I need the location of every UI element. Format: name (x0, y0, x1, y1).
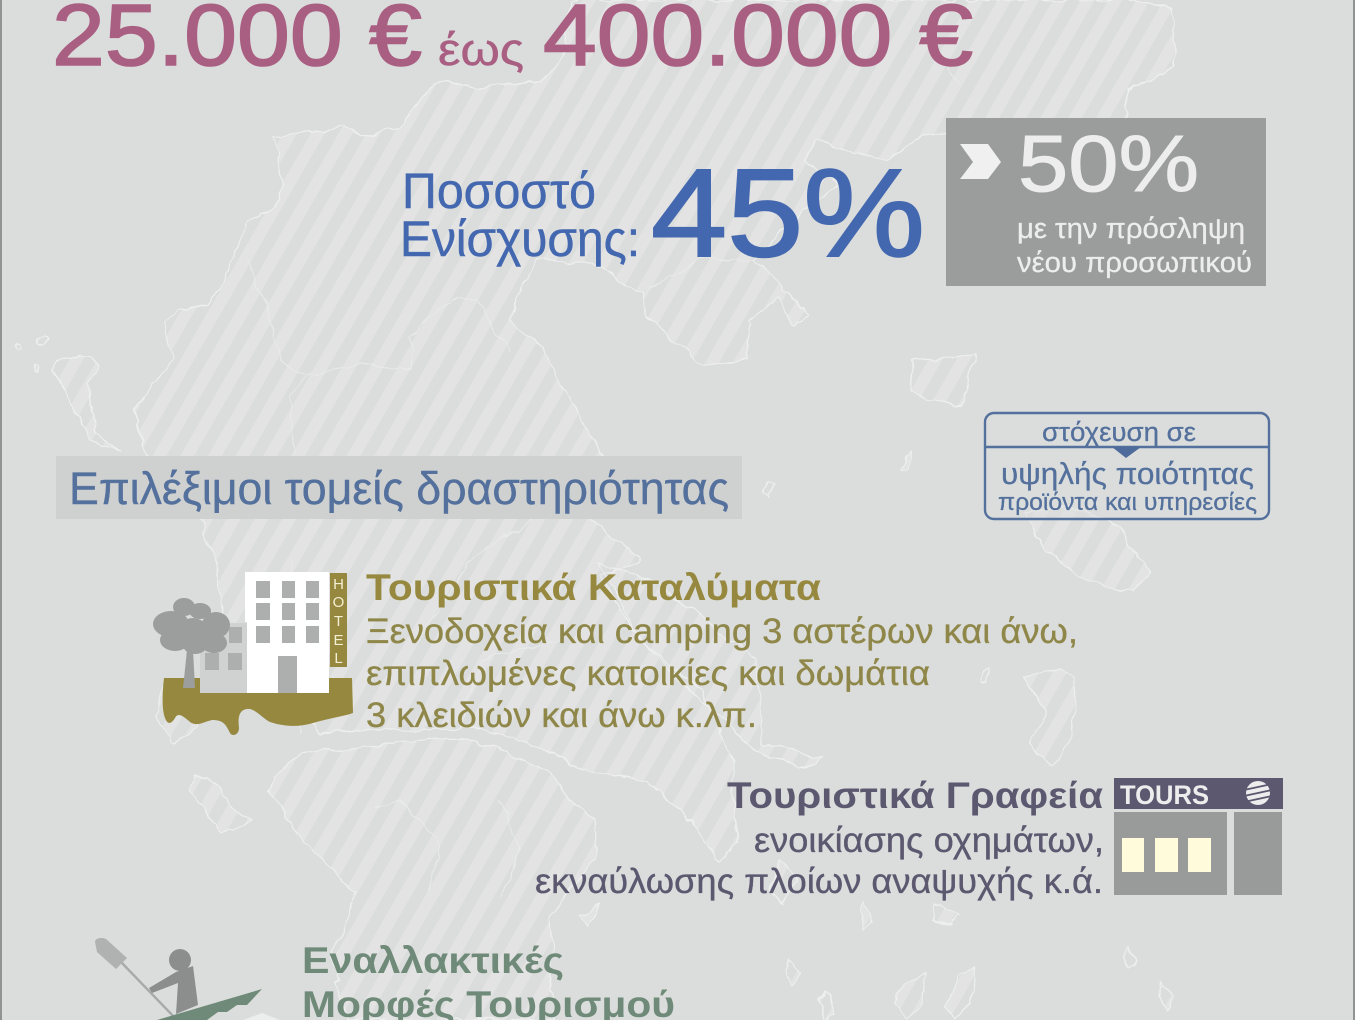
text block: alternative tourism (302, 940, 675, 1020)
text block: tourist accommodation (366, 567, 1078, 735)
icon: hotel on ground with tree (153, 572, 353, 735)
heading: funding range amounts (52, 0, 973, 84)
icon: hotel on ground with tree: T (334, 613, 343, 630)
icon: kayaker (95, 938, 280, 1020)
hiring note (1017, 213, 1252, 279)
icon: tours shop (1114, 778, 1283, 895)
icon: hotel on ground with tree: E (333, 632, 344, 649)
icon: hotel on ground with tree: H (333, 576, 344, 593)
panel: 50% with new staff hiring (946, 118, 1266, 286)
callout: targeting high quality products and services: προϊόντα και υπηρεσίες (998, 489, 1257, 516)
text block: travel agencies: ενοικίασης οχημάτων, (754, 821, 1104, 860)
subsidy rate label: Ποσοστό (402, 163, 596, 219)
subsidy rate label: Ενίσχυσης: (400, 211, 640, 267)
heading: funding range amounts: έως (438, 24, 524, 75)
callout: targeting high quality products and services: υψηλής ποιότητας (1001, 456, 1254, 491)
icon: chevron arrow (960, 144, 1001, 179)
text block: tourist accommodation: Ξενοδοχεία και camping 3 αστέρων και άνω, (366, 612, 1078, 651)
callout: targeting high quality products and services (985, 413, 1269, 519)
text block: alternative tourism: Εναλλακτικές (302, 940, 564, 981)
callout: targeting high quality products and services: στόχευση σε (1042, 417, 1196, 447)
text block: travel agencies: εκναύλωσης πλοίων αναψυχής κ.ά. (535, 862, 1103, 901)
icon: tours shop: TOURS (1120, 780, 1209, 810)
text block: tourist accommodation: επιπλωμένες κατοικίες και δωμάτια (366, 654, 930, 693)
text block: tourist accommodation: Τουριστικά Καταλύματα (366, 567, 821, 608)
icon: hotel on ground with tree: L (334, 650, 343, 667)
hiring note: νέου προσωπικού (1017, 247, 1252, 279)
icon: hotel on ground with tree: O (333, 594, 344, 611)
hiring note: με την πρόσληψη (1017, 213, 1245, 245)
subsidy rate label (400, 163, 640, 267)
subsidy rate value 45%: 45% (651, 144, 925, 283)
text block: travel agencies (535, 775, 1104, 901)
text block: travel agencies: Τουριστικά Γραφεία (727, 775, 1103, 816)
value 50%: 50% (1018, 119, 1199, 208)
text block: tourist accommodation: 3 κλειδιών και άνω κ.λπ. (366, 696, 757, 735)
section heading banner: Επιλέξιμοι τομείς δραστηριότητας (69, 463, 729, 514)
